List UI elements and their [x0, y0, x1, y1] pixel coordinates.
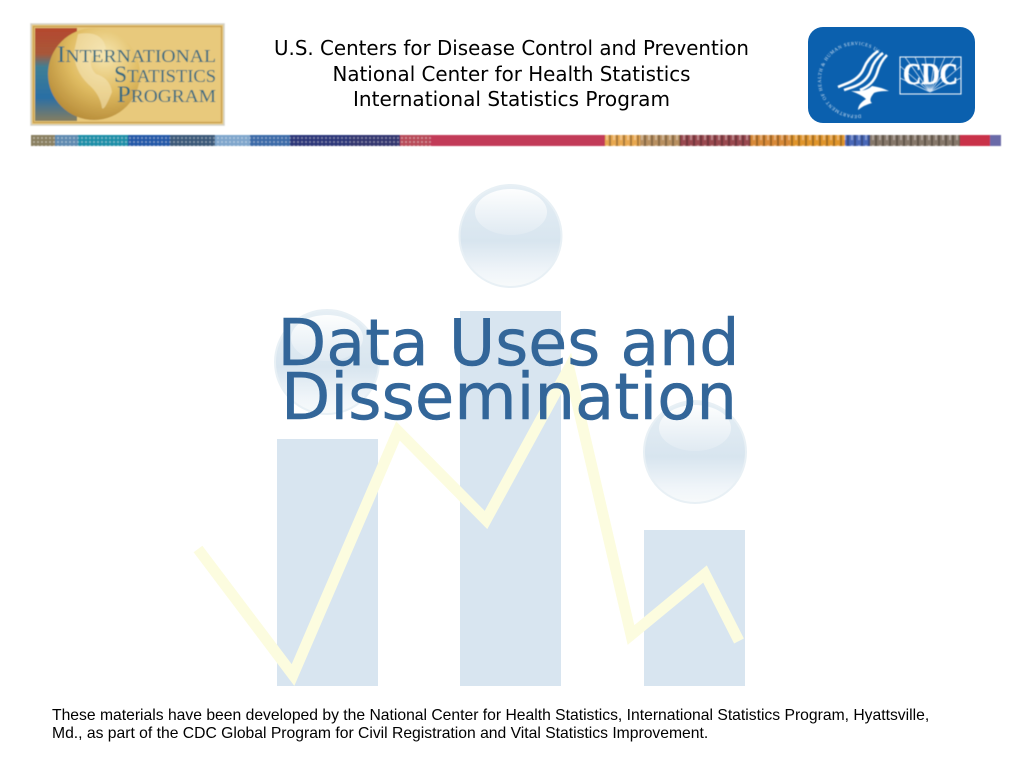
sphere: right	[644, 401, 746, 503]
logo: HHS and CDC: DEPARTMENT OF HEALTH & HUMAN SERVICES USA	[817, 41, 882, 119]
title: Data Uses and	[278, 306, 740, 381]
logo: International Statistics Program: INTERNATIONAL	[57, 42, 216, 67]
header: organisation names: National Center for Health Statistics	[332, 62, 690, 86]
title: Dissemination	[281, 360, 737, 435]
logo: International Statistics Program: STATISTICS	[114, 62, 216, 87]
logo: HHS and CDC	[808, 27, 975, 123]
header: organisation names	[274, 36, 749, 111]
trend line	[198, 368, 739, 675]
bar: middle	[460, 311, 561, 686]
sphere: middle	[460, 185, 562, 287]
chart watermark: bars, spheres and line	[198, 185, 746, 686]
sphere: left	[275, 310, 379, 414]
logo: International Statistics Program	[31, 24, 224, 125]
footer note: These materials have been developed by the National Center for Health Statistics, International Statistics Program, Hyattsville,	[52, 707, 929, 724]
footer note: Md., as part of the CDC Global Program for Civil Registration and Vital Statistics Improvement.	[52, 725, 708, 742]
bar: right	[644, 530, 745, 686]
footer note	[52, 707, 929, 742]
decorative strip banner	[31, 135, 1001, 146]
title	[278, 306, 740, 435]
logo: HHS and CDC: CDC	[903, 56, 958, 91]
header: organisation names: International Statistics Program	[353, 87, 670, 111]
logo: International Statistics Program: PROGRAM	[117, 82, 216, 107]
header: organisation names: U.S. Centers for Disease Control and Prevention	[274, 36, 749, 60]
bar: left	[277, 439, 378, 686]
